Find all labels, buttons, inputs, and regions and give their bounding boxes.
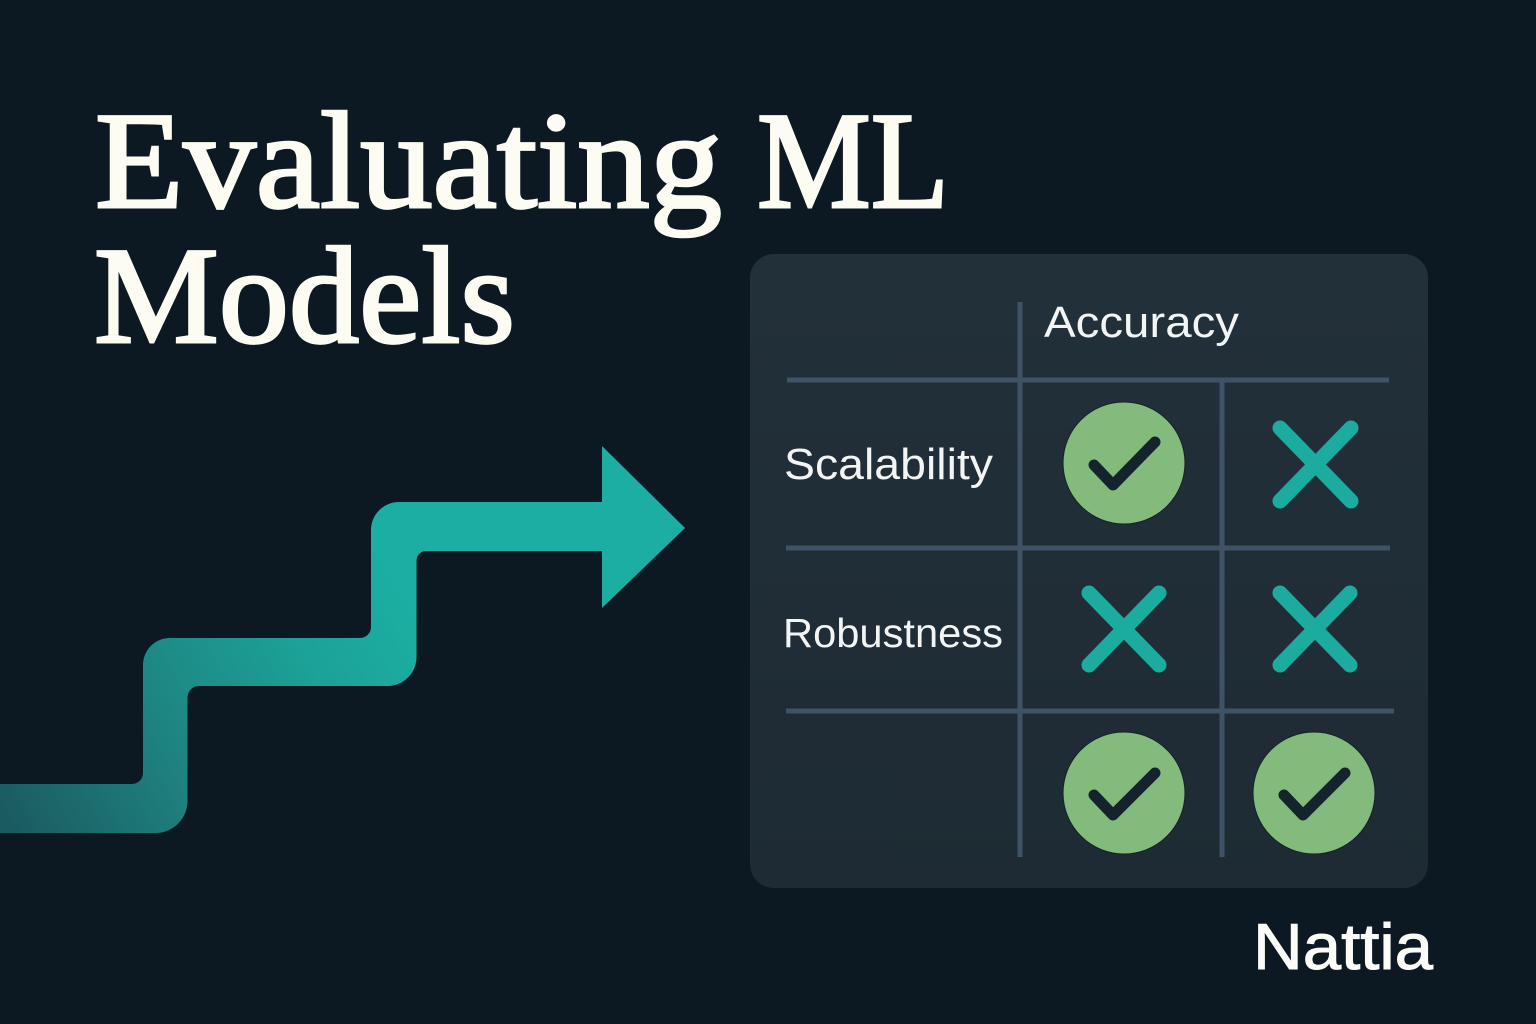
icon: check row 3 col 1 [1063,732,1185,854]
title: Evaluating [95,84,722,237]
arrow: rising step arrow [0,446,685,833]
row label: Robustness: Robustness [783,610,1003,656]
icon: check row 3 col 2 [1253,732,1375,854]
row label: Scalability: Scalability [784,440,993,489]
icon: cross row 1 col 2 [1280,428,1351,501]
column label: Accuracy: Accuracy [1044,298,1239,347]
panel: evaluation matrix [750,254,1428,888]
brand name: Nattia [1253,910,1434,983]
title [94,84,949,372]
icon: cross row 2 col 1 [1089,593,1159,665]
title: ML [757,84,949,237]
title: Models [94,219,515,372]
icon: check row 1 col 1 [1063,402,1185,524]
icon: cross row 2 col 2 [1280,593,1350,665]
